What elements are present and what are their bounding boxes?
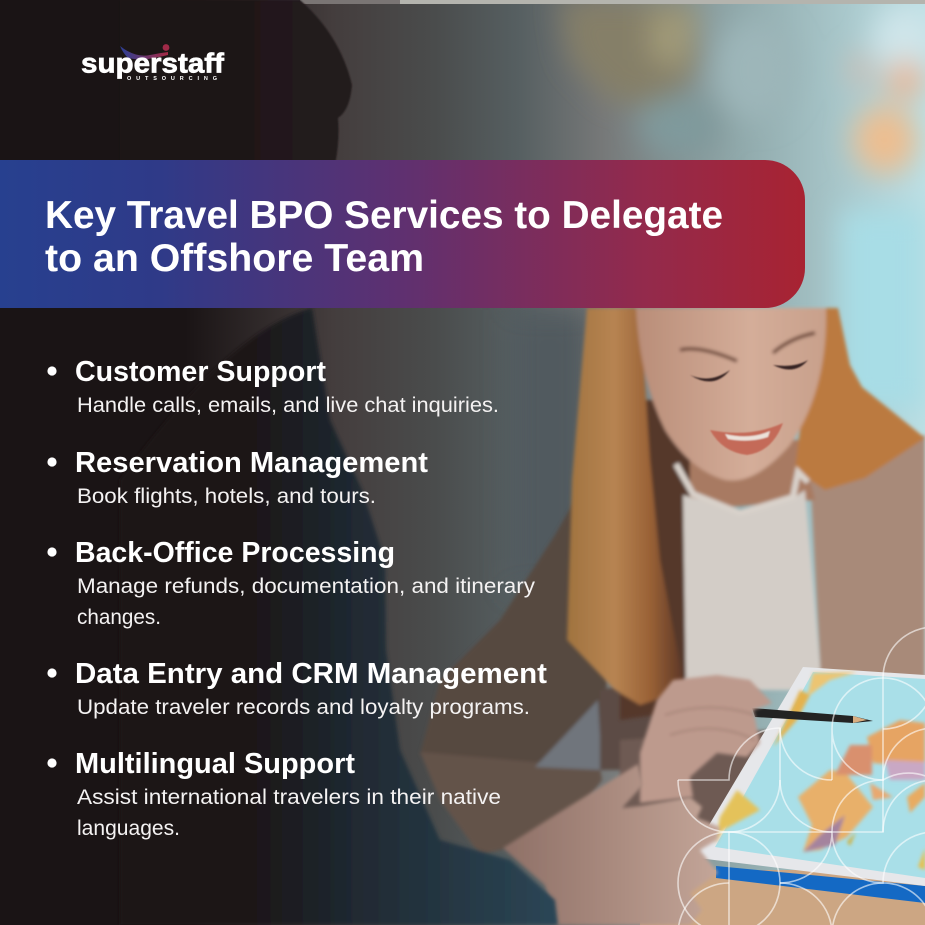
top edge strip <box>300 0 925 4</box>
item: customer support: Handle calls, emails, and live chat inquiries. <box>77 393 499 417</box>
woman <box>567 308 925 720</box>
item: reservation management <box>47 447 428 508</box>
item: multilingual support <box>47 748 501 840</box>
item: data entry and crm management: Update traveler records and loyalty programs. <box>77 695 530 719</box>
item: customer support <box>47 356 499 417</box>
logo dot <box>163 44 169 51</box>
item: data entry and crm management <box>47 658 547 719</box>
decorative line pattern <box>678 627 925 925</box>
item: reservation management: Book flights, hotels, and tours. <box>77 484 376 508</box>
man's hand <box>503 764 720 925</box>
wall map blobs <box>510 0 925 590</box>
item: back-office processing: Back-Office Processing <box>75 537 395 569</box>
logo: superstaff outsourcing <box>81 44 225 82</box>
woman's blazer sleeve <box>420 500 780 860</box>
item: multilingual support: Multilingual Support <box>75 748 355 780</box>
banner background <box>0 160 805 308</box>
item: data entry and crm management: Data Entry and CRM Management <box>75 658 547 690</box>
map continents <box>715 672 925 870</box>
blouse collar <box>676 464 808 513</box>
title: Key Travel BPO Services to Delegate <box>45 194 723 237</box>
item: back-office processing <box>47 537 535 629</box>
pencil <box>752 708 873 723</box>
item: multilingual support: Assist international travelers in their native <box>77 785 501 809</box>
woman's eyes and mouth <box>690 360 808 455</box>
title: to an Offshore Team <box>45 237 424 280</box>
title <box>45 194 723 280</box>
man's shirt <box>120 308 558 925</box>
item: back-office processing: changes. <box>77 605 161 629</box>
item: reservation management: Reservation Management <box>75 447 428 479</box>
logo tagline: OUTSOURCING <box>127 76 217 82</box>
item: back-office processing: Manage refunds, documentation, and itinerary <box>77 574 535 598</box>
woman's hand <box>640 675 772 803</box>
logo wordmark: superstaff <box>81 48 225 78</box>
item: customer support: Customer Support <box>75 356 326 388</box>
service list <box>47 356 547 840</box>
item: multilingual support: languages. <box>77 816 180 840</box>
title banner <box>0 160 805 308</box>
logo swoosh <box>120 46 168 60</box>
open map book <box>690 667 925 903</box>
man's head <box>120 0 352 165</box>
table <box>640 870 925 925</box>
